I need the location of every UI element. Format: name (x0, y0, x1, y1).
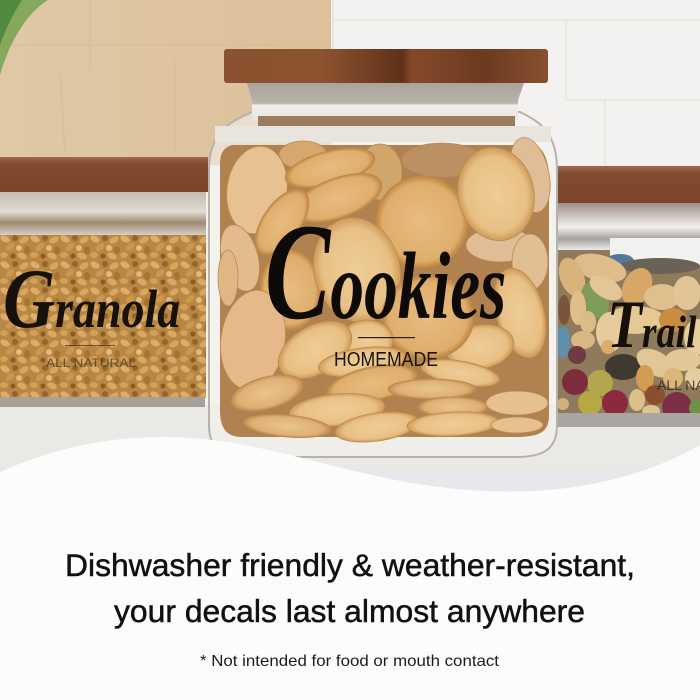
counter front (0, 468, 700, 500)
shoulder reflection (258, 116, 515, 126)
cookies label: Cookies (265, 195, 506, 348)
tile wall lines (333, 0, 700, 165)
headline: Dishwasher friendly & weather-resistant, (65, 547, 635, 583)
cookies (214, 134, 556, 447)
trail label (607, 286, 700, 393)
footnote: * Not intended for food or mouth contact (200, 653, 500, 670)
headline: your decals last almost anywhere (114, 593, 585, 629)
trail label: Trail (607, 286, 697, 362)
trail mix pieces (554, 238, 700, 422)
headline (65, 547, 635, 629)
cookie fill (220, 145, 549, 437)
granola label: Granola (3, 253, 180, 346)
lid (224, 49, 548, 83)
white wave panel (0, 437, 700, 700)
jar: trail mix (554, 166, 700, 427)
plant leaves (0, 0, 48, 75)
counter (0, 405, 700, 468)
granola label: ALL NATURAL (46, 356, 136, 370)
jar: cookies (209, 49, 557, 457)
jar: granola (0, 157, 208, 407)
neck (247, 83, 524, 120)
wood board (0, 0, 331, 165)
glass body (209, 112, 557, 457)
cookies label: HOMEMADE (334, 349, 438, 371)
